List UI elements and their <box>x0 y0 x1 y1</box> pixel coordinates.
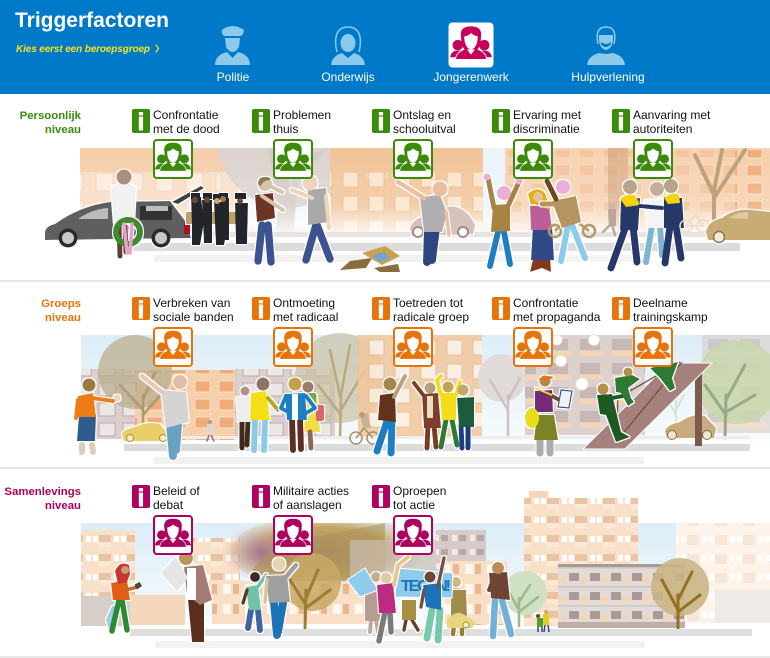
heading <box>393 296 469 324</box>
label: politie: Politie <box>217 70 250 84</box>
person: distant pedestrian <box>207 420 214 441</box>
heading <box>153 296 234 324</box>
trigger: confrontatie met propaganda <box>492 296 601 366</box>
label: jongerenwerk: Jongerenwerk <box>433 70 510 84</box>
icon: jongerenwerk <box>394 328 432 366</box>
banner: tegen: TEGEN! <box>401 578 451 595</box>
level label: niveau <box>45 312 81 324</box>
heading: Problemen <box>273 108 331 122</box>
icon: jongerenwerk <box>274 328 312 366</box>
heading: Ervaring met <box>513 108 582 122</box>
info button: i <box>498 109 504 136</box>
heading: met de dood <box>153 122 220 136</box>
icon: hulpverlening <box>587 27 625 65</box>
heading: Toetreden tot <box>393 296 464 310</box>
heading: sociale banden <box>153 310 234 324</box>
icon: jongerenwerk <box>634 328 672 366</box>
info button: i <box>258 485 264 512</box>
illustration: scattered belongings <box>340 246 400 272</box>
heading <box>273 108 331 136</box>
trigger: militaire acties of aanslagen <box>252 484 349 554</box>
panel: persoonlijk niveau <box>20 109 770 272</box>
person: man waving in white shirt <box>142 375 189 456</box>
level label <box>41 298 81 324</box>
info button: i <box>258 109 264 136</box>
heading: of aanslagen <box>273 498 342 512</box>
heading: Aanvaring met <box>633 108 711 122</box>
trigger: problemen thuis <box>252 108 331 178</box>
heading: Deelname <box>633 296 688 310</box>
level label: niveau <box>45 500 81 512</box>
car: tan car right <box>706 210 770 242</box>
info button: i <box>138 485 144 512</box>
info button: i <box>618 109 624 136</box>
heading: Ontslag en <box>393 108 451 122</box>
trigger: aanvaring met autoriteiten <box>612 108 711 178</box>
info button: i <box>138 297 144 324</box>
person: man leaving grey shirt <box>398 182 449 262</box>
heading: Militaire acties <box>273 484 349 498</box>
car: tan car behind ramp <box>665 415 716 440</box>
car: small parked car <box>410 207 475 237</box>
heading: radicale groep <box>393 310 469 324</box>
info button: i <box>378 297 384 324</box>
heading: discriminatie <box>513 122 580 136</box>
heading: trainingskamp <box>633 310 708 324</box>
person: man in blue jacket <box>281 378 315 450</box>
bicycle: motor scooter <box>549 216 595 237</box>
group: police officers with youth <box>611 179 684 268</box>
heading <box>393 108 456 136</box>
heading <box>633 108 711 136</box>
trigger: ervaring met discriminatie <box>492 108 582 178</box>
trigger: confrontatie met de dood <box>132 108 220 178</box>
heading: debat <box>153 498 184 512</box>
trigger: deelname trainingskamp <box>612 296 708 366</box>
person: man arms raised <box>484 174 522 266</box>
person: man in brown jacket <box>489 562 511 636</box>
scene background: street row 2 <box>81 333 770 464</box>
icon: jongerenwerk <box>154 516 192 554</box>
info button: i <box>378 109 384 136</box>
level label <box>20 110 82 136</box>
icon: jongerenwerk <box>514 328 552 366</box>
heading: Oproepen <box>393 484 446 498</box>
group: two distant children <box>536 610 549 632</box>
icon: jongerenwerk <box>274 140 312 178</box>
person: distant marchers <box>402 577 467 634</box>
trigger: oproepen tot actie <box>372 484 446 554</box>
group: youths with raised arms <box>377 376 474 453</box>
icon: onderwijs <box>331 27 365 65</box>
heading: Ontmoeting <box>273 296 335 310</box>
icon: politie <box>215 26 250 65</box>
arrow: chevron <box>156 45 158 52</box>
level label: niveau <box>45 124 81 136</box>
person: woman with blue sign <box>365 572 381 632</box>
person: woman in green scarf with bag <box>302 382 324 448</box>
level label <box>4 486 81 512</box>
car: hatchback with open boot <box>45 186 204 248</box>
icon: jongerenwerk <box>154 328 192 366</box>
trigger: ontmoeting met radicaal <box>252 296 338 366</box>
scene background: street row 1: SCHOOL <box>366 174 403 180</box>
scene background: street row 1 <box>80 148 770 262</box>
person: man reading newspaper <box>161 551 212 642</box>
trigger: ontslag en schooluitval <box>372 108 456 178</box>
group: protesters with banner <box>347 557 467 641</box>
person: man with tan jacket <box>542 180 585 261</box>
person: distant pedestrian <box>603 203 616 235</box>
heading <box>393 484 446 512</box>
sign: blue board <box>347 568 378 597</box>
person: child in teal <box>243 572 266 630</box>
level label: Samenlevings <box>4 486 81 498</box>
person: woman with phone and shopping bag <box>106 563 142 632</box>
icon: jongerenwerk <box>634 140 672 178</box>
heading: met radicaal <box>273 310 338 324</box>
heading: Verbreken van <box>153 296 230 310</box>
title: Triggerfactoren <box>15 9 169 32</box>
icon: jongerenwerk <box>514 140 552 178</box>
info button: i <box>138 109 144 136</box>
person: woman in magenta <box>377 557 408 641</box>
person: dark-trousered man back view <box>236 386 250 448</box>
icon: jongerenwerk selected <box>448 22 494 68</box>
person: arguing man brown shirt <box>255 177 283 262</box>
person: man in blue shirt <box>421 558 444 640</box>
heading: met propaganda <box>513 310 601 324</box>
car: yellow car behind <box>447 613 476 628</box>
trigger: verbreken van sociale banden <box>132 296 234 366</box>
person: activist with tablet <box>525 376 572 453</box>
car: yellow car <box>122 423 168 442</box>
label: onderwijs: Onderwijs <box>321 70 375 84</box>
icons: speech bubbles <box>552 334 600 390</box>
heading <box>633 296 708 324</box>
person: man in grey with arm raised <box>265 558 296 635</box>
heading <box>513 296 601 324</box>
heading: Beleid of <box>153 484 200 498</box>
heading: Confrontatie <box>153 108 219 122</box>
icon: jongerenwerk <box>154 140 192 178</box>
funeral: coffin and pallbearers <box>186 193 248 245</box>
heading <box>153 108 220 136</box>
label: hulpverlening: Hulpverlening <box>571 70 645 84</box>
level label: Groeps <box>41 298 81 310</box>
subtitle prompt: Kies eerst een beroepsgroep <box>16 44 150 55</box>
person: woman in headscarf <box>528 189 554 272</box>
icon: jongerenwerk <box>394 140 432 178</box>
heading <box>153 484 200 512</box>
heading: schooluitval <box>393 122 456 136</box>
level label: Persoonlijk <box>20 110 82 122</box>
icon: jongerenwerk <box>274 516 312 554</box>
person: arguing man grey shirt <box>292 176 330 260</box>
icon: jongerenwerk <box>394 516 432 554</box>
illustration: training ramp <box>583 362 712 449</box>
heading: Confrontatie <box>513 296 579 310</box>
person: man in yellow shirt <box>250 378 278 450</box>
person: mourner with wreath <box>111 170 140 256</box>
heading <box>273 296 338 324</box>
heading: thuis <box>273 122 298 136</box>
info button: i <box>258 297 264 324</box>
person: woman waving in orange <box>76 378 120 452</box>
trigger: beleid of debat <box>132 484 200 554</box>
trigger: toetreden tot radicale groep <box>372 296 469 366</box>
info button: i <box>498 297 504 324</box>
group: climbers on ramp <box>597 362 678 442</box>
heading <box>273 484 349 512</box>
header band <box>0 0 770 94</box>
heading <box>513 108 582 136</box>
info button: i <box>378 485 384 512</box>
bicycle: parked bike <box>680 214 709 232</box>
scene background: city row 3 <box>81 491 770 648</box>
bicycle: cyclist <box>350 412 379 444</box>
info button: i <box>618 297 624 324</box>
panel: samenlevings niveau <box>4 484 770 648</box>
panel: groeps niveau <box>41 296 770 464</box>
heading: tot actie <box>393 498 435 512</box>
heading: autoriteiten <box>633 122 692 136</box>
